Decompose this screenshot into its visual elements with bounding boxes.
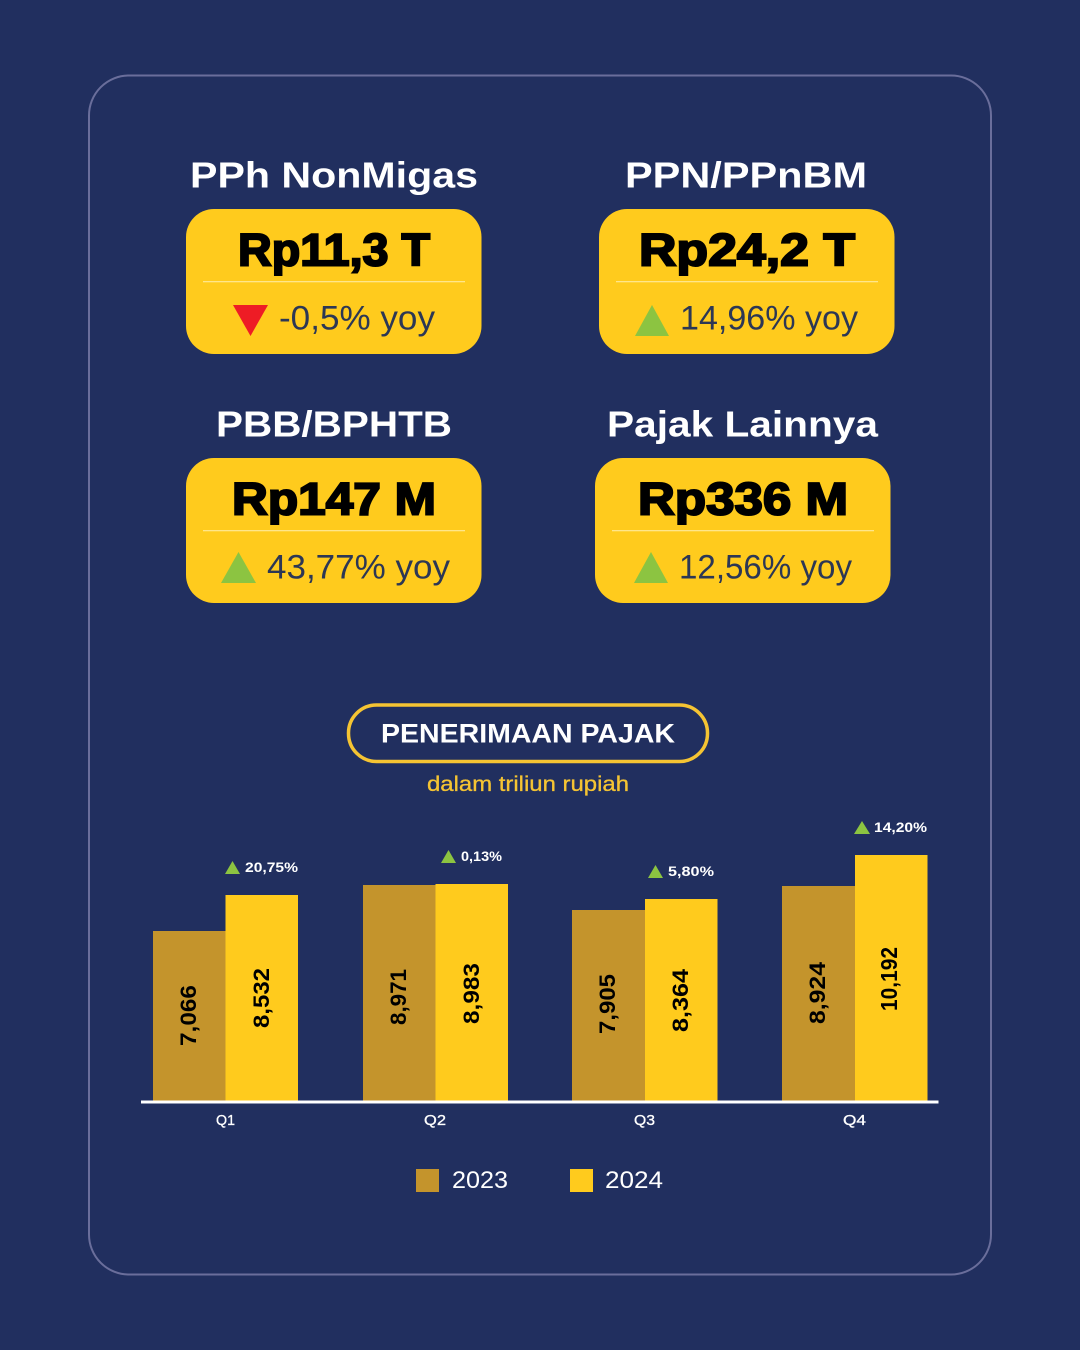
Q1 group: 7,066: [176, 985, 201, 1046]
panel: PBB/BPHTB: [186, 404, 482, 603]
Q3 group: 8,364: [668, 968, 693, 1032]
Q2 group: 8,971: [386, 969, 411, 1025]
change: 43,77% yoy: 43,77% yoy: [267, 548, 450, 586]
legend: 2023: [452, 1167, 508, 1194]
Q3 group: Q3: [634, 1112, 655, 1129]
panel: Pajak Lainnya: [595, 404, 890, 603]
panel: main frame: [89, 76, 991, 1274]
value: Rp24,2 T: Rp24,2 T: [639, 224, 855, 276]
heading: Penerimaan Pajak pill: [348, 705, 708, 762]
card: PBB/BPHTB: [186, 458, 482, 603]
card: PPh NonMigas: [186, 209, 482, 354]
legend: [416, 1167, 663, 1194]
bar chart: [141, 819, 938, 1129]
Q2 group: [363, 848, 508, 1129]
Q2 group: Q2: [424, 1112, 446, 1129]
Q4 group: 10,192: [876, 947, 902, 1011]
heading: Pajak Lainnya: Pajak Lainnya: [607, 404, 879, 444]
Q4 group: 8,924: [805, 961, 830, 1024]
Q4 group: 14,20%: [874, 819, 928, 835]
heading: PBB/BPHTB: PBB/BPHTB: [216, 404, 452, 444]
panel: PPh NonMigas: [186, 154, 482, 354]
value: Rp336 M: Rp336 M: [638, 474, 848, 524]
Q4 group: Q4: [843, 1112, 866, 1129]
Q3 group: 7,905: [595, 974, 620, 1034]
icon: green up triangle: [634, 552, 668, 583]
change: 14,96% yoy: 14,96% yoy: [680, 300, 858, 338]
panel: PPN/PPnBM: [599, 154, 894, 354]
card: PPN/PPnBM: [599, 209, 894, 354]
value: Rp11,3 T: Rp11,3 T: [238, 224, 430, 276]
Q3 group: [572, 863, 718, 1129]
change: 12,56% yoy: 12,56% yoy: [679, 548, 852, 586]
icon: red down triangle: [233, 305, 268, 336]
subtitle: dalam triliun rupiah: dalam triliun rupiah: [427, 773, 629, 796]
legend: 2024: [605, 1167, 663, 1194]
heading: PPh NonMigas: PPh NonMigas: [190, 154, 478, 196]
card: Pajak Lainnya: [595, 458, 890, 603]
icon: green up triangle: [221, 552, 256, 583]
heading: Penerimaan Pajak pill: PENERIMAAN PAJAK: [381, 718, 676, 748]
Q2 group: 0,13%: [461, 848, 503, 864]
Q2 group: 8,983: [459, 963, 484, 1024]
Q1 group: [153, 859, 299, 1129]
Q4 group: [782, 819, 928, 1129]
heading: PPN/PPnBM: PPN/PPnBM: [625, 154, 867, 196]
Q1 group: 20,75%: [245, 859, 299, 875]
Q3 group: 5,80%: [668, 863, 715, 879]
Q1 group: Q1: [216, 1112, 235, 1129]
Q1 group: 8,532: [249, 968, 274, 1028]
change: -0,5% yoy: -0,5% yoy: [279, 300, 435, 338]
icon: green up triangle: [635, 305, 669, 336]
value: Rp147 M: Rp147 M: [232, 474, 436, 524]
